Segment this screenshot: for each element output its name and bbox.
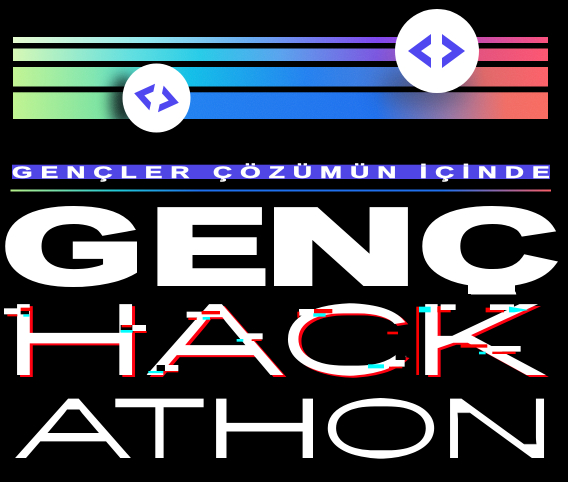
icon: large code badge [395, 9, 479, 93]
title: ATHON: A [12, 382, 134, 475]
title: HACK with glitch effect [0, 284, 549, 395]
title: ATHON: N [432, 382, 562, 475]
title: GENÇ [5, 206, 558, 294]
title: GENÇ: N [266, 187, 416, 305]
title: HACK with glitch effect: A [144, 284, 286, 395]
title: ATHON: O [316, 382, 446, 475]
title: HACK with glitch effect: C [274, 285, 417, 395]
gradient bars [13, 37, 548, 128]
title: GENÇ: Ç [420, 187, 556, 306]
icon: small code badge [122, 64, 190, 132]
gradient divider line [10, 190, 551, 192]
title: HACK with glitch effect: K [403, 284, 549, 395]
title: GENÇ: E [151, 187, 267, 306]
title: ATHON [12, 382, 562, 475]
subtitle banner: GENÇLER ÇÖZÜMÜN İÇİNDE [12, 163, 550, 182]
title: ATHON: T [108, 382, 211, 475]
title: GENÇ: G [3, 188, 143, 306]
title: ATHON: H [197, 382, 332, 475]
